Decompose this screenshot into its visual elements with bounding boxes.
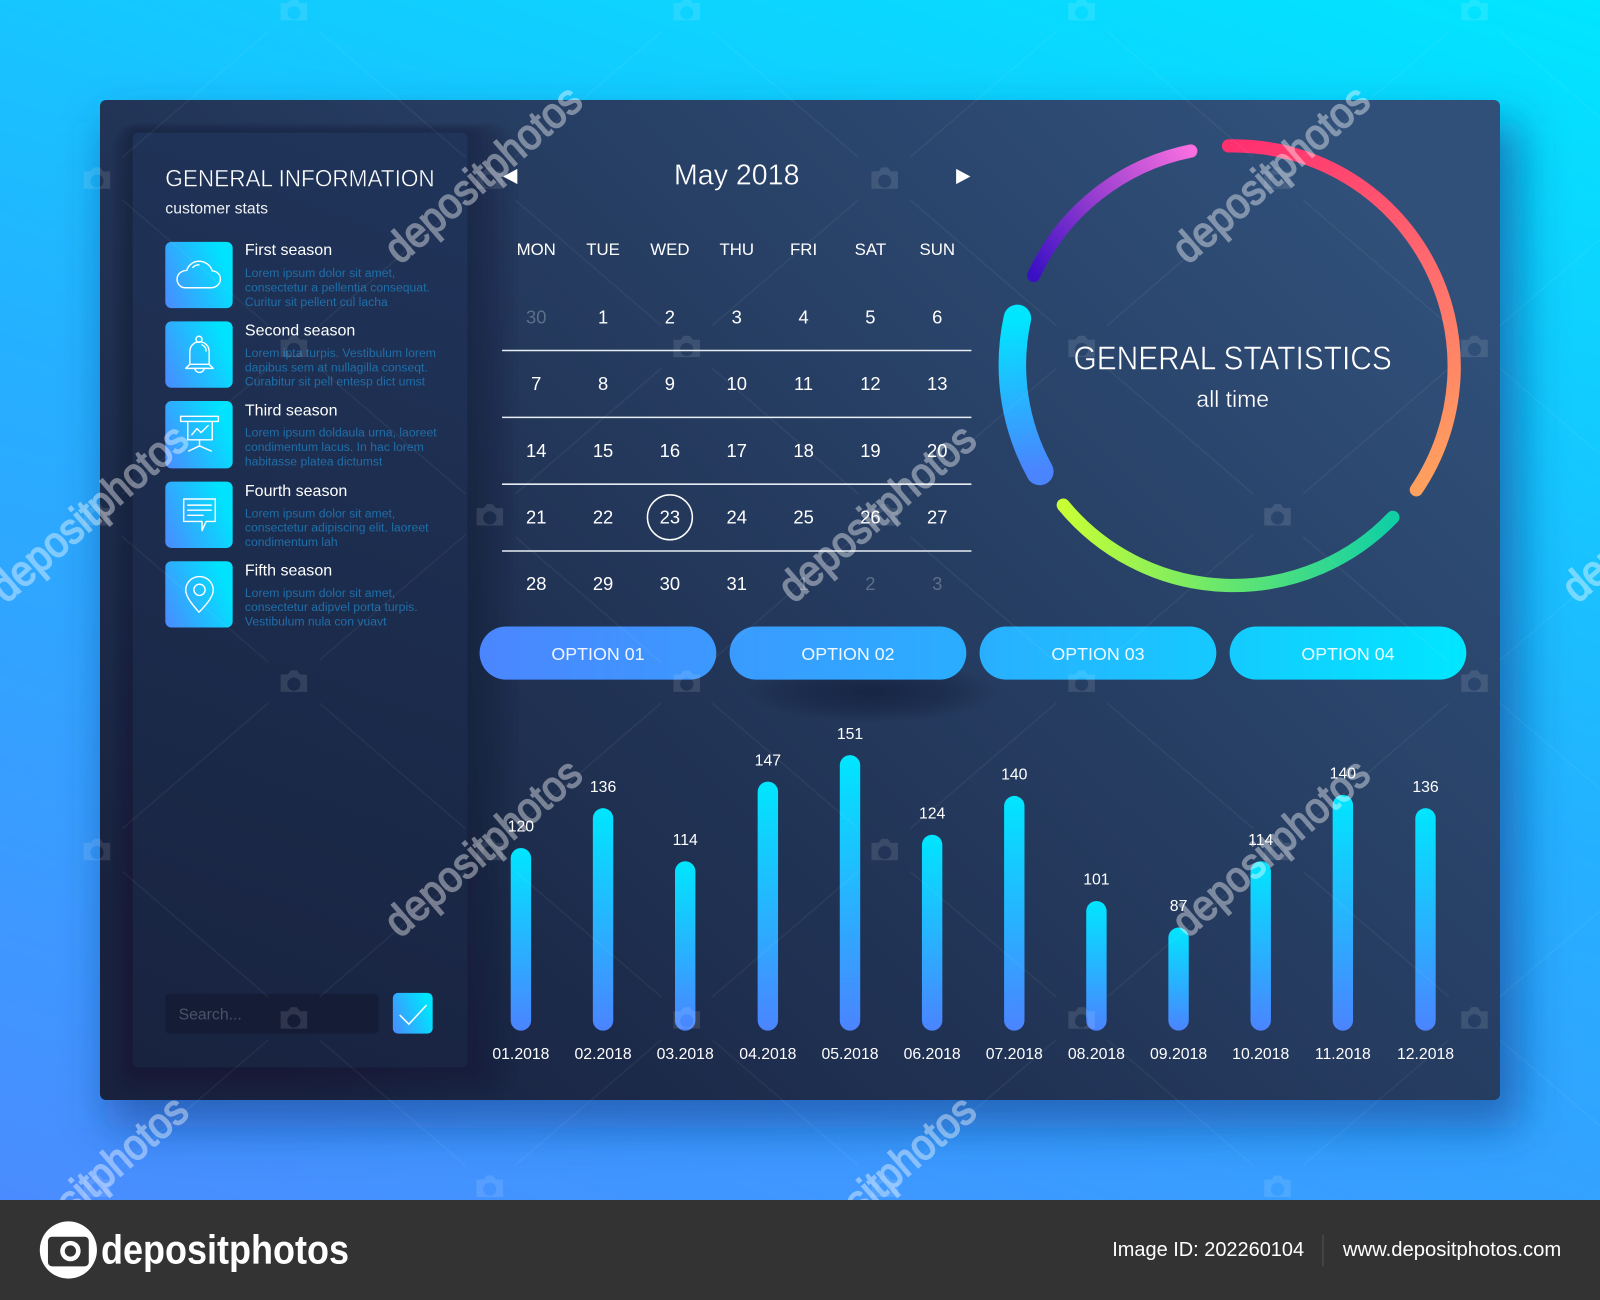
bar 12.2018	[1397, 779, 1454, 1063]
item: first season: Lorem ipsum dolor sit amet,	[245, 266, 395, 280]
weekday headers: FRI	[790, 240, 817, 259]
week 5: 1	[798, 573, 809, 594]
bar 11.2018: 140	[1330, 766, 1356, 783]
week 5: 29	[593, 573, 613, 594]
item: first season: First season	[245, 241, 332, 259]
heading: general statistics: GENERAL STATISTICS	[1073, 340, 1392, 377]
item: first season: consectetur a pellentia consequat.	[245, 280, 430, 294]
week 4: 23	[660, 506, 680, 527]
arc: blue	[1012, 318, 1040, 471]
item: fourth season: Lorem ipsum dolor sit amet,	[245, 506, 395, 520]
week 3	[526, 440, 947, 461]
week 2: 12	[860, 373, 881, 394]
bar 02.2018: 136	[590, 779, 616, 796]
bar 01.2018	[492, 819, 550, 1063]
item: third season: Third season	[245, 401, 337, 419]
week 3: 15	[593, 440, 613, 461]
arc: green	[1063, 505, 1393, 585]
button: option 01	[480, 627, 716, 680]
item: third season: condimentum lacus. In hac lorem	[245, 440, 424, 454]
week 2: 9	[665, 373, 675, 394]
bar 07.2018	[986, 767, 1043, 1063]
icon: bell	[186, 336, 213, 372]
bar 03.2018: 03.2018	[657, 1046, 714, 1063]
item: fifth season	[165, 561, 418, 629]
button: option 02: OPTION 02	[801, 644, 895, 664]
watermark layer: depositphotos	[769, 415, 985, 612]
arc: red to orange	[1229, 146, 1454, 490]
week 1: 6	[932, 306, 942, 327]
week 3: 16	[660, 440, 680, 461]
arrow: previous month	[503, 169, 517, 184]
icon: map pin	[186, 577, 213, 612]
item: third season	[165, 401, 437, 468]
item: second season: Lorem ipta turpis. Vestibulum lorem	[245, 346, 436, 360]
item: first season	[165, 241, 430, 309]
bar 06.2018	[904, 805, 961, 1063]
item: fifth season: Vestibulum nula con vuavt	[245, 615, 387, 629]
bar 08.2018: 08.2018	[1068, 1046, 1125, 1063]
week 5: 3	[932, 573, 942, 594]
week 2: 8	[598, 373, 608, 394]
button: option 04	[1230, 627, 1466, 680]
item: fourth season	[165, 482, 429, 549]
heading: general information: GENERAL INFORMATION	[165, 166, 435, 193]
week 5: 28	[526, 573, 546, 594]
bar 06.2018: 06.2018	[904, 1046, 961, 1063]
weekday headers: TUE	[586, 240, 620, 259]
button: option 01: OPTION 01	[551, 644, 645, 664]
weekday headers: SUN	[919, 240, 955, 259]
panel: dashboard	[100, 100, 1500, 1100]
weekday headers: THU	[719, 240, 754, 259]
week 2: 13	[927, 373, 947, 394]
footer logo wordmark: depositphotos	[101, 1226, 349, 1272]
item: first season: Curitur sit pellent cul lacha	[245, 295, 388, 309]
week 3: 18	[793, 440, 814, 461]
week 4: 27	[927, 506, 947, 527]
week 4: 22	[593, 506, 613, 527]
item: third season: Lorem ipsum doldaula urna, laoreet	[245, 426, 437, 440]
bar 01.2018: 01.2018	[492, 1046, 550, 1063]
icon: presentation board	[181, 416, 218, 451]
weekday headers: SAT	[855, 240, 886, 259]
item: fourth season: condimentum lah	[245, 535, 338, 549]
bar 03.2018: 114	[673, 832, 698, 849]
item: fifth season: Fifth season	[245, 562, 332, 580]
current day ring	[647, 495, 692, 540]
button: option 02	[730, 627, 966, 680]
website url: www.depositphotos.com	[1342, 1239, 1561, 1261]
image id: Image ID: 202260104	[1112, 1239, 1304, 1261]
week 5: 31	[727, 573, 747, 594]
item: second season: Second season	[245, 322, 355, 340]
week 1	[526, 306, 942, 327]
button: option 03	[980, 627, 1216, 680]
watermark layer: depositphotos	[1163, 749, 1379, 946]
bar 01.2018: 120	[508, 819, 534, 836]
week 1: 2	[665, 306, 675, 327]
week 5: 2	[865, 573, 876, 594]
bar 08.2018	[1068, 872, 1125, 1063]
icon: speech bubble	[184, 499, 215, 531]
panel: general information sidebar	[112, 122, 518, 1098]
week 3: 20	[927, 440, 947, 461]
bar 12.2018: 12.2018	[1397, 1046, 1454, 1063]
bar 08.2018: 101	[1083, 872, 1110, 889]
search box	[165, 994, 379, 1034]
item: third season: habitasse platea dictumst	[245, 454, 383, 468]
bar 11.2018	[1315, 766, 1371, 1063]
item: fourth season: consectetur adipiscing elit. laoreet	[245, 521, 429, 535]
week 1: 3	[732, 306, 742, 327]
arrow: next month	[956, 169, 970, 184]
weekday headers: MON	[517, 240, 556, 259]
subheading: all time: all time	[1196, 386, 1269, 412]
bar 04.2018: 04.2018	[739, 1046, 797, 1063]
week 2: 11	[794, 373, 813, 394]
option buttons	[480, 627, 1466, 722]
item: second season: Curabitur sit pell entesp dict umst	[245, 375, 426, 389]
weekday headers	[517, 240, 955, 259]
bar 09.2018	[1150, 898, 1207, 1063]
watermark layer: depositphotos	[1163, 76, 1379, 273]
button: option 03: OPTION 03	[1051, 644, 1145, 664]
bar 03.2018	[657, 832, 714, 1063]
week 5	[526, 573, 942, 594]
bar 02.2018: 02.2018	[575, 1046, 632, 1063]
week 5: 30	[660, 573, 680, 594]
bar 06.2018: 124	[919, 805, 946, 822]
bar 02.2018	[575, 779, 632, 1063]
icon: cloud	[177, 261, 220, 288]
item: second season: dapibus sem at nullagilla conseqt.	[245, 360, 428, 374]
bar 11.2018: 11.2018	[1315, 1046, 1371, 1063]
item: fourth season: Fourth season	[245, 482, 347, 500]
subheading: customer stats: customer stats	[165, 200, 268, 217]
bar 05.2018: 151	[837, 726, 863, 743]
week 2	[531, 373, 947, 394]
bar 09.2018: 87	[1170, 898, 1187, 915]
watermark layer: depositphotos	[375, 749, 591, 946]
weekday headers: WED	[650, 240, 690, 259]
week 4: 26	[860, 506, 881, 527]
item: fifth season: Lorem ipsum dolor sit amet,	[245, 586, 395, 600]
watermark layer: depositphotos	[769, 1086, 985, 1283]
arc: purple	[1034, 151, 1191, 276]
bar 10.2018	[1232, 832, 1289, 1063]
ring chart	[1012, 146, 1454, 585]
footer bar	[0, 1200, 1600, 1300]
bar 07.2018: 07.2018	[986, 1046, 1043, 1063]
week 2: 7	[531, 373, 541, 394]
bar 05.2018	[821, 726, 879, 1063]
week 1: 30	[526, 306, 546, 327]
bar 12.2018: 136	[1412, 779, 1439, 796]
week 1: 5	[865, 306, 876, 327]
item: fifth season: consectetur adipvel porta turpis.	[245, 600, 418, 614]
week 4	[526, 506, 947, 527]
bar 10.2018: 114	[1248, 832, 1274, 849]
watermark layer: depositphotos	[375, 76, 591, 273]
week 4: 21	[526, 506, 546, 527]
footer logo icon	[40, 1221, 97, 1279]
week 4: 24	[727, 506, 747, 527]
search box: Search...	[179, 1006, 242, 1023]
calendar	[502, 160, 971, 594]
calendar title: May 2018	[674, 160, 799, 192]
bar 07.2018: 140	[1001, 767, 1028, 784]
week 3: 17	[727, 440, 747, 461]
week 4: 25	[793, 506, 814, 527]
bar 05.2018: 05.2018	[821, 1046, 879, 1063]
bar 04.2018	[739, 752, 797, 1063]
bar 09.2018: 09.2018	[1150, 1046, 1207, 1063]
button: option 04: OPTION 04	[1301, 644, 1395, 664]
week 3: 19	[860, 440, 881, 461]
bar 10.2018: 10.2018	[1232, 1046, 1289, 1063]
item: second season	[165, 321, 436, 389]
panel shadow	[107, 122, 1520, 1128]
checkbox	[393, 993, 433, 1034]
week 2: 10	[727, 373, 747, 394]
week 1: 4	[798, 306, 809, 327]
bar 04.2018: 147	[755, 752, 781, 769]
week 3: 14	[526, 440, 546, 461]
week 1: 1	[598, 306, 608, 327]
bar chart	[492, 726, 1454, 1063]
